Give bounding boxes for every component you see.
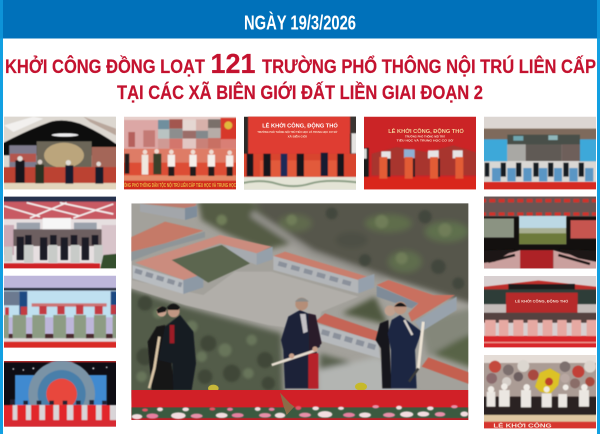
photo: red backdrop ceremony: TRƯỜNG PHỔ THÔNG NỘI TRÚ TIỂU HỌC VÀ TRUNG HỌC CƠ SỞ [257,129,338,134]
photo: collage backdrop with officials [124,116,236,190]
photo: red backdrop with white-shirted officials and podiums: TIỂU HỌC VÀ TRUNG HỌC CƠ SỞ [397,137,454,142]
photo: red backdrop with white-shirted officials and podiums [364,116,476,190]
photo: stage with black arch and gold screen [4,116,116,190]
leaders left [148,304,196,390]
photo: red backdrop with white-shirted officials and podiums: TRƯỜNG PHỔ THÔNG NỘI TRÚ [405,134,445,139]
photo: left column, striped roof with podiums [4,196,116,268]
photo: right column, hall with central screen and audience [484,196,596,268]
photo: red backdrop ceremony: XÃ BIÊN GIỚI [288,133,307,138]
leaders right [376,302,423,388]
photo: red backdrop with white-shirted officials and podiums: LỄ KHỞI CÔNG, ĐỘNG THỔ [388,127,464,135]
photo: blue screens with podiums [484,116,596,190]
leader centre [272,298,322,389]
title: KHỞI CÔNG ĐỒNG LOẠT [5,56,205,78]
school buildings [125,203,472,385]
photo: red backdrop ceremony [244,116,356,190]
photo: right column, crowd with yellow lion head [484,355,596,428]
header bar with date [0,0,600,38]
stage edge lights [208,382,367,390]
header bar with date: NGÀY 19/3/2026 [244,12,356,34]
photo: left column, round motif screen with red podiums [4,361,116,427]
photo: red backdrop ceremony: LỄ KHỞI CÔNG, ĐỘNG THỔ [262,122,338,130]
photo: right column, red board with pink podiums: LỄ KHỞI CÔNG, ĐỘNG THỔ [515,299,568,304]
photo: right column, crowd with yellow lion head: LỄ KHỞI CÔNG [493,422,553,430]
main photo: leaders breaking ground in front of school rendering [131,203,468,420]
title: TẠI CÁC XÃ BIÊN GIỚI ĐẤT LIỀN GIAI ĐOẠN 2 [117,82,483,104]
red stage with lotus flowers [131,390,468,420]
title: 121 [210,48,256,79]
title [5,48,596,104]
photo: collage backdrop with officials: ÔNG PHỔ THÔNG DÂN TỘC NỘI TRÚ LIÊN CẤP TIỂU HỌC VÀ TRUNG HỌC [124,181,236,189]
photo: left column, light blue screen with gray-green podiums [4,276,116,348]
photo: right column, red board with pink podiums [484,276,596,348]
rendering backdrop [131,203,468,420]
